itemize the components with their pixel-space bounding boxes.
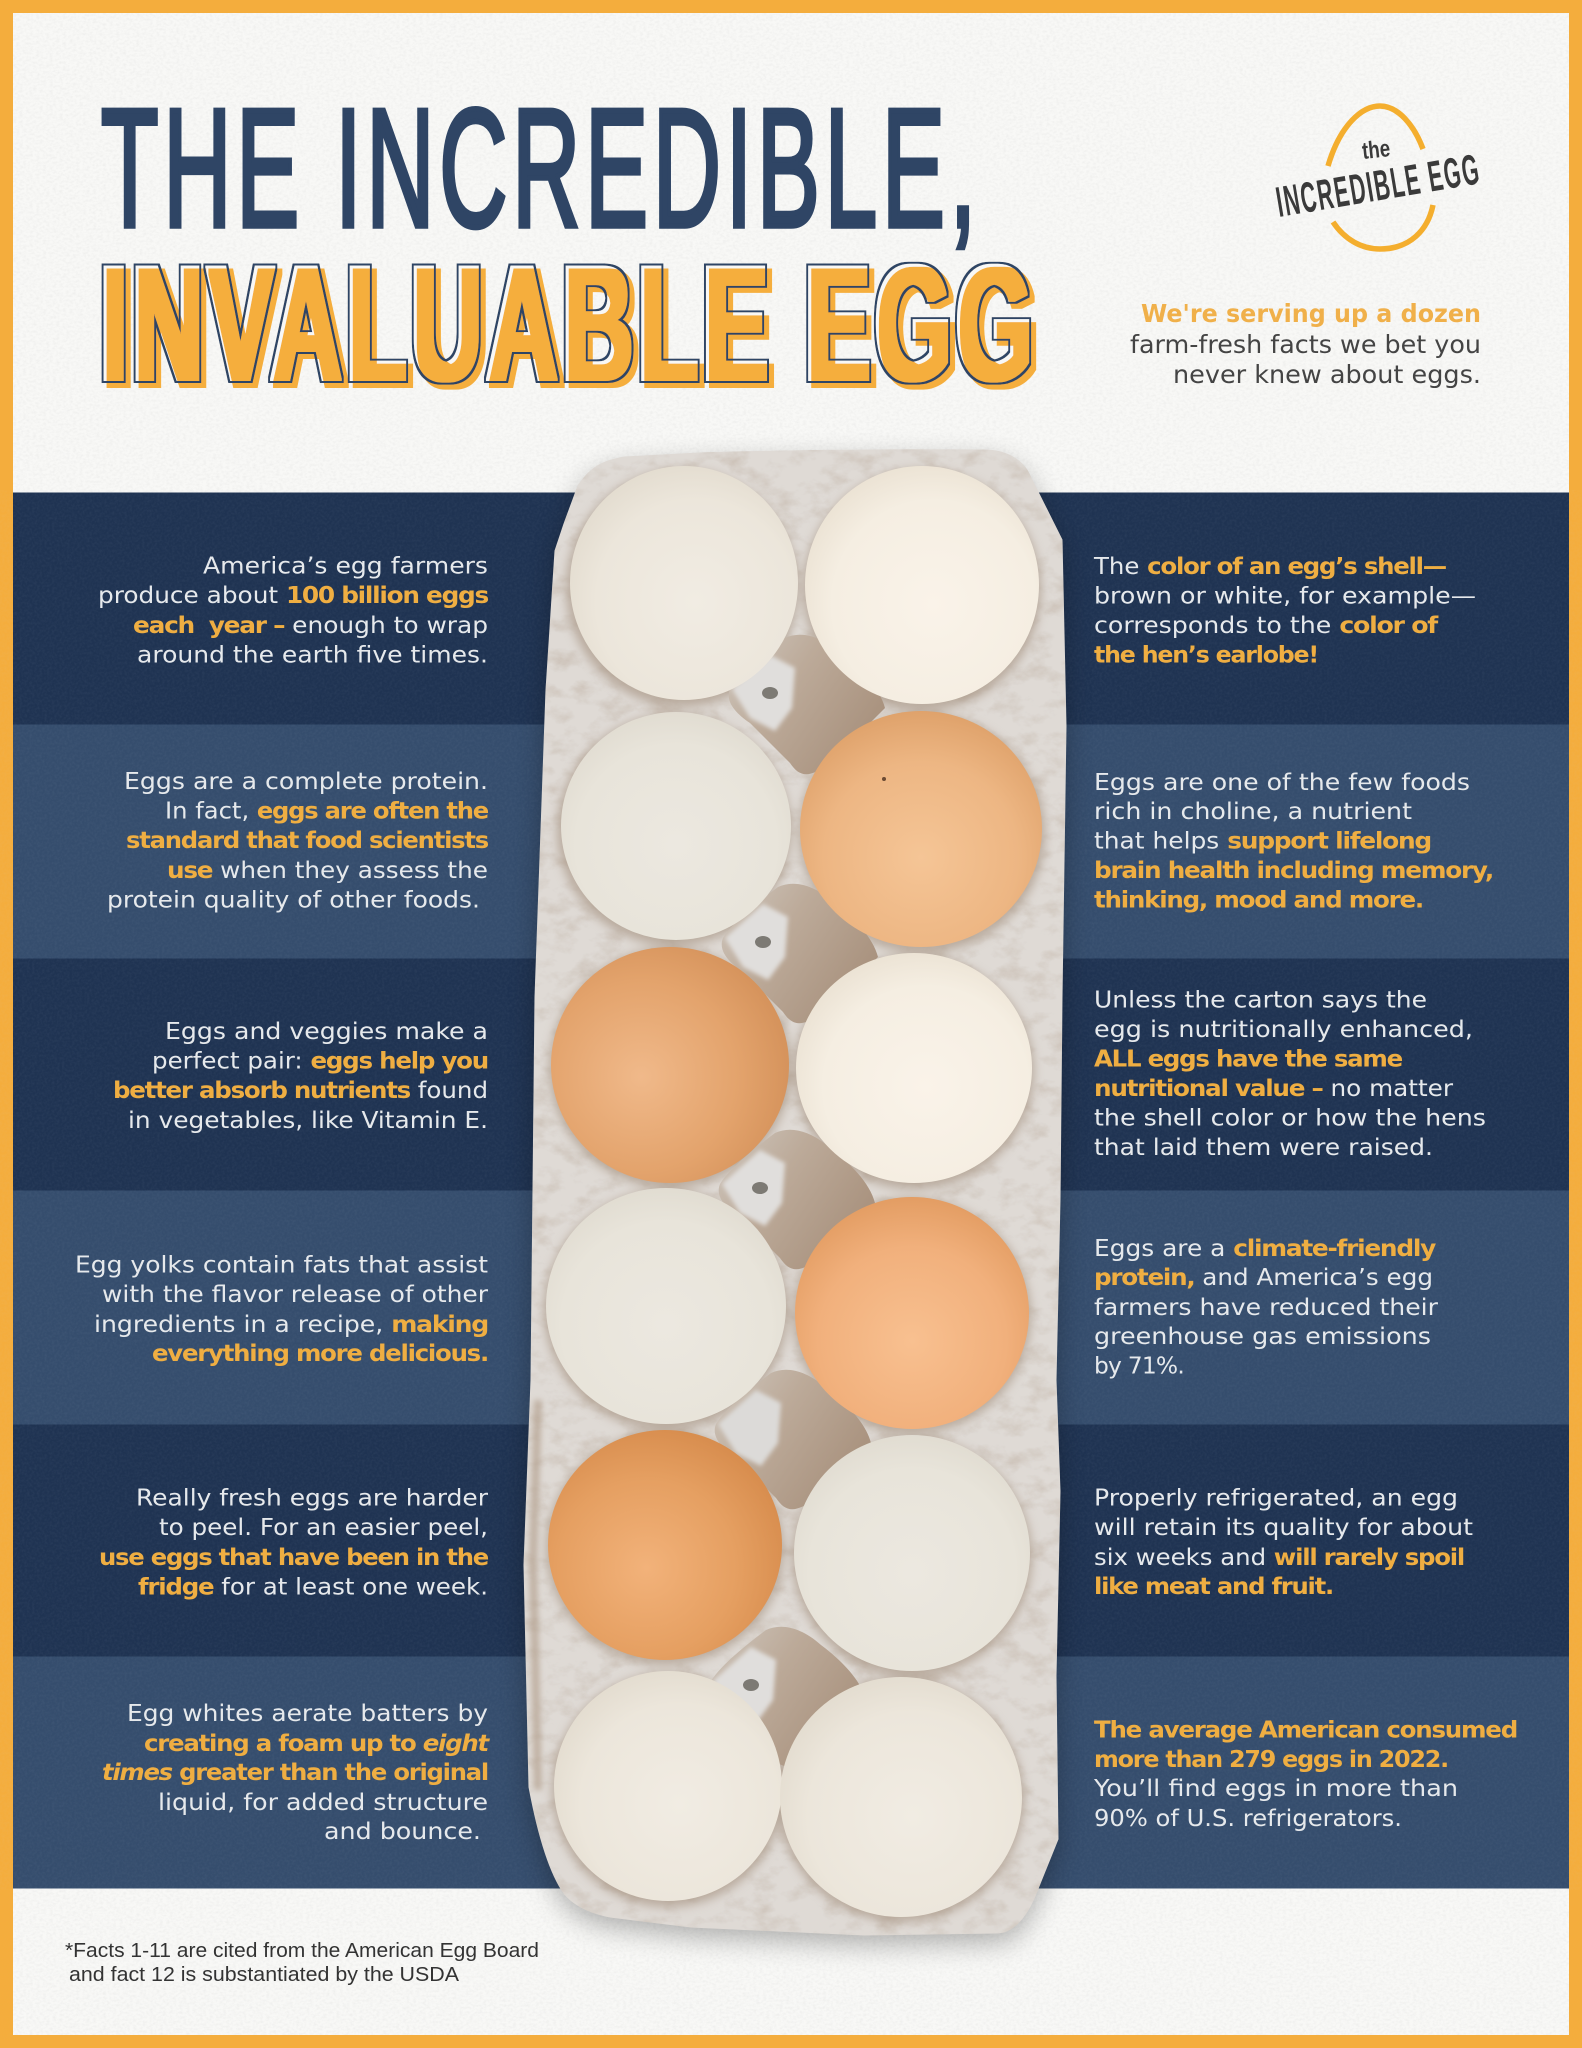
fact 9: nutritional value – no matter [1094, 1074, 1453, 1102]
fact 7: The color of an egg’s shell— [1093, 552, 1447, 580]
fact 4: Egg yolks contain fats that assist [75, 1251, 488, 1279]
fact 9: egg is nutritionally enhanced, [1094, 1015, 1473, 1043]
fact 5: use eggs that have been in the [99, 1543, 488, 1571]
fact 9: that laid them were raised. [1094, 1133, 1433, 1161]
logo egg outline [1328, 106, 1433, 249]
fact 5: Really fresh eggs are harder [136, 1484, 488, 1512]
carton tray [525, 451, 1065, 1934]
fact 4: with the flavor release of other [102, 1280, 488, 1308]
fact 6: times greater than the original [102, 1758, 488, 1786]
fact 6: creating a foam up to eight [144, 1729, 490, 1757]
fact 5: to peel. For an easier peel, [159, 1513, 488, 1541]
intro text: farm-fresh facts we bet you [1130, 330, 1481, 359]
fact 3: better absorb nutrients found [113, 1076, 488, 1104]
fact 1: produce about 100 billion eggs [98, 581, 488, 609]
fact 11: Properly refrigerated, an egg [1094, 1484, 1458, 1512]
fact 11 [1094, 1484, 1473, 1600]
facts left column [75, 552, 490, 1845]
fact 10 [1094, 1234, 1438, 1380]
footnote: *Facts 1-11 are cited from the American Egg Board [65, 1940, 539, 1962]
fact 5 [99, 1484, 488, 1601]
carton dividers [710, 635, 885, 1766]
footnote [65, 1940, 539, 1986]
fact 8 [1094, 768, 1493, 914]
fact 7: corresponds to the color of [1094, 611, 1439, 639]
fact 11: like meat and fruit. [1094, 1572, 1333, 1600]
fact 1: each year – enough to wrap [133, 611, 488, 639]
fact 3 [113, 1017, 488, 1134]
fact 5: fridge for at least one week. [138, 1573, 488, 1601]
fact 7 [1093, 552, 1476, 669]
fact 12 [1093, 1716, 1517, 1832]
intro text: never knew about eggs. [1173, 360, 1481, 389]
fact 10: greenhouse gas emissions [1094, 1322, 1431, 1350]
fact 10: farmers have reduced their [1094, 1293, 1438, 1321]
fact 12: You’ll find eggs in more than [1093, 1774, 1458, 1802]
fact 2: protein quality of other foods. [107, 886, 480, 914]
carton edge crease [533, 1400, 538, 1790]
logo text: the [1361, 135, 1391, 165]
footnote: and fact 12 is substantiated by the USDA [69, 1964, 460, 1986]
fact 6: liquid, for added structure [158, 1788, 488, 1816]
logo text [1273, 135, 1484, 227]
fact 6: and bounce. [324, 1817, 481, 1845]
fact 9 [1094, 986, 1486, 1161]
fact 12: 90% of U.S. refrigerators. [1094, 1804, 1402, 1832]
eggs [546, 466, 1042, 1917]
fact 8: brain health including memory, [1094, 856, 1493, 884]
fact 9: Unless the carton says the [1094, 986, 1427, 1014]
fact 6 [102, 1699, 490, 1845]
carton egg wells [544, 469, 1045, 1922]
fact 12: more than 279 eggs in 2022. [1094, 1745, 1448, 1773]
fact 2: use when they assess the [167, 856, 488, 884]
fact 12: The average American consumed [1094, 1716, 1517, 1744]
fact 8: Eggs are one of the few foods [1094, 768, 1470, 796]
fact 2: Eggs are a complete protein. [124, 767, 488, 795]
fact 7: the hen’s earlobe! [1094, 641, 1318, 669]
fact 7: brown or white, for example— [1094, 582, 1476, 610]
fact 2: standard that food scientists [126, 826, 488, 854]
fact 1: around the earth five times. [137, 640, 488, 668]
fact 2: In fact, eggs are often the [165, 797, 488, 825]
fact 10: by 71%. [1094, 1352, 1184, 1380]
fact 2 [107, 767, 488, 914]
fact 9: ALL eggs have the same [1094, 1045, 1402, 1073]
title [100, 74, 1037, 415]
egg carton with eggs [525, 451, 1065, 1944]
fact 8: rich in choline, a nutrient [1094, 797, 1412, 825]
fact 10: protein, and America’s egg [1094, 1263, 1433, 1291]
fact 4: everything more delicious. [152, 1339, 488, 1367]
fact 1: America’s egg farmers [203, 552, 488, 580]
logo [1273, 106, 1484, 249]
facts right column [1093, 552, 1517, 1832]
intro text [1130, 299, 1481, 389]
fact 1 [98, 552, 488, 668]
fact 4: ingredients in a recipe, making [94, 1310, 488, 1338]
fact 9: the shell color or how the hens [1094, 1104, 1486, 1132]
fact 3: Eggs and veggies make a [165, 1017, 488, 1045]
carton shadow [525, 461, 1065, 1944]
navy striped bands [13, 492, 1569, 1888]
intro text: We're serving up a dozen [1141, 299, 1481, 328]
fact 3: perfect pair: eggs help you [152, 1046, 488, 1074]
fact 10: Eggs are a climate-friendly [1094, 1234, 1436, 1262]
fact 4 [75, 1251, 488, 1367]
fact 6: Egg whites aerate batters by [127, 1699, 488, 1727]
fact 11: will retain its quality for about [1094, 1513, 1473, 1541]
fact 3: in vegetables, like Vitamin E. [128, 1106, 488, 1134]
fact 8: thinking, mood and more. [1094, 886, 1423, 914]
fact 11: six weeks and will rarely spoil [1094, 1543, 1464, 1571]
fact 8: that helps support lifelong [1094, 827, 1431, 855]
